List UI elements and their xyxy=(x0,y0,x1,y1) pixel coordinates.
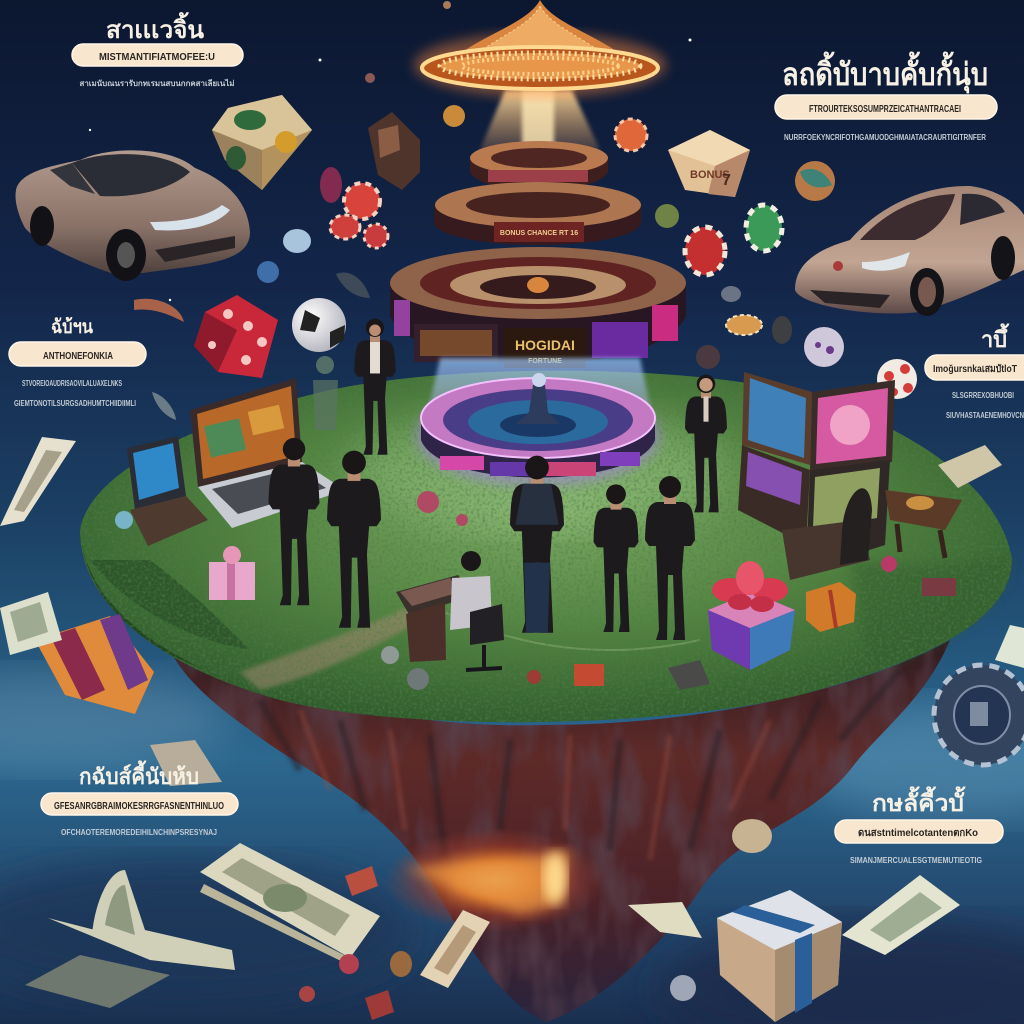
icon: large poker chip xyxy=(934,665,1024,765)
person xyxy=(327,451,381,628)
callout: right xyxy=(925,323,1024,420)
person: standing far right xyxy=(685,375,727,512)
callout: top left: สาเมนับณนรารับกทเรมนสบนกกคสาเลียเนไม่ xyxy=(80,78,234,88)
icon: wrapped cardboard box xyxy=(717,890,842,1022)
person xyxy=(645,476,695,640)
callout: left xyxy=(9,316,146,408)
icon: left car xyxy=(15,150,250,281)
neon roulette on ground xyxy=(416,373,660,486)
icon: red dice xyxy=(194,295,278,378)
seated player at desk xyxy=(396,551,504,670)
icon: side table with banknote xyxy=(885,445,1002,558)
callout: bottom right: ดนสstntimelcotantenตกKo xyxy=(858,828,978,839)
icons: banknotes xyxy=(0,437,1024,1008)
callout: top left xyxy=(72,11,243,88)
person: standing far left xyxy=(354,319,396,455)
callout: bottom right: SIMANJMERCUALESGTMEMUTIEOTIG xyxy=(850,856,982,865)
panel: slot machines xyxy=(738,372,895,580)
second ring xyxy=(434,182,641,245)
callout: right: าบึ้ xyxy=(981,323,1010,352)
icon: left stack box xyxy=(35,614,154,714)
icon: cream cube with text: 7 xyxy=(722,172,731,189)
large roulette ring: FORTUNE xyxy=(528,358,562,365)
icon: large cream die with green pips xyxy=(212,95,312,190)
icon: poker chips xyxy=(134,112,792,420)
icon: small dice and chips at bottom xyxy=(299,646,710,1020)
person xyxy=(594,484,638,632)
callout: left: ฉับ้ฯน xyxy=(51,316,93,338)
large roulette ring xyxy=(390,247,686,368)
person xyxy=(268,438,320,605)
icon: small arcade kiosk xyxy=(115,436,208,546)
callout: left: STVOREIOAUDRISAOVILALUAXELNKS xyxy=(22,379,122,388)
callout: bottom left: กฉับส์คี้นับห้บ xyxy=(79,760,199,789)
golden lamp beacon xyxy=(414,0,666,160)
floating island grass top xyxy=(80,371,1012,722)
icon: cream cube with text xyxy=(668,130,750,197)
large roulette ring: HOGIDAI xyxy=(515,337,575,353)
callout: left: GIEMTONOTILSURGSADHUMTCHIIDIIMLI xyxy=(14,399,136,408)
callout: left: ANTHONEFONKIA xyxy=(43,351,113,362)
floating island rock underside xyxy=(170,640,950,1022)
icon: floating balls and planets xyxy=(257,1,917,1001)
callout: bottom left xyxy=(41,760,238,837)
callout: top left: MISTMANTIFIATMOFEE:U xyxy=(99,52,215,63)
callout: top right xyxy=(775,51,997,142)
callout: bottom left: GFESANRGBRAIMOKESRRGFASNENTHINLUO xyxy=(54,801,224,812)
figure: ghost robot xyxy=(313,356,338,430)
callout: bottom right xyxy=(835,786,1003,865)
callout: top right: ลถดิ้บับาบคั้บกั้นุ่บ xyxy=(782,51,988,94)
icon: laptop xyxy=(190,378,345,528)
small top ring xyxy=(470,141,608,190)
group of people in foreground xyxy=(268,438,695,640)
person xyxy=(510,456,564,633)
second ring: BONUS CHANCE RT 16 xyxy=(500,230,578,237)
icon: right car xyxy=(795,186,1024,316)
callout: top left: สาเเเวจิ้น xyxy=(106,11,205,44)
callout: top right: FTROURTEKSOSUMPRZEICATHANTRACAEI xyxy=(809,104,961,115)
roulette tier stack xyxy=(390,141,686,486)
callout: bottom right: กษลั้คี้วบั้ xyxy=(872,786,966,816)
icon: gift boxes xyxy=(209,491,956,686)
icon: cream cube with text: BONUS xyxy=(690,169,730,181)
callout: top right: NURRFOEKYNCRIFOTHGAMUODGHMAIATACRAURTIGITRNFER xyxy=(784,133,986,142)
glow beam xyxy=(424,358,655,430)
callout: bottom left: OFCHAOTEREMOREDEIHILNCHINPSRESYNAJ xyxy=(61,828,217,837)
